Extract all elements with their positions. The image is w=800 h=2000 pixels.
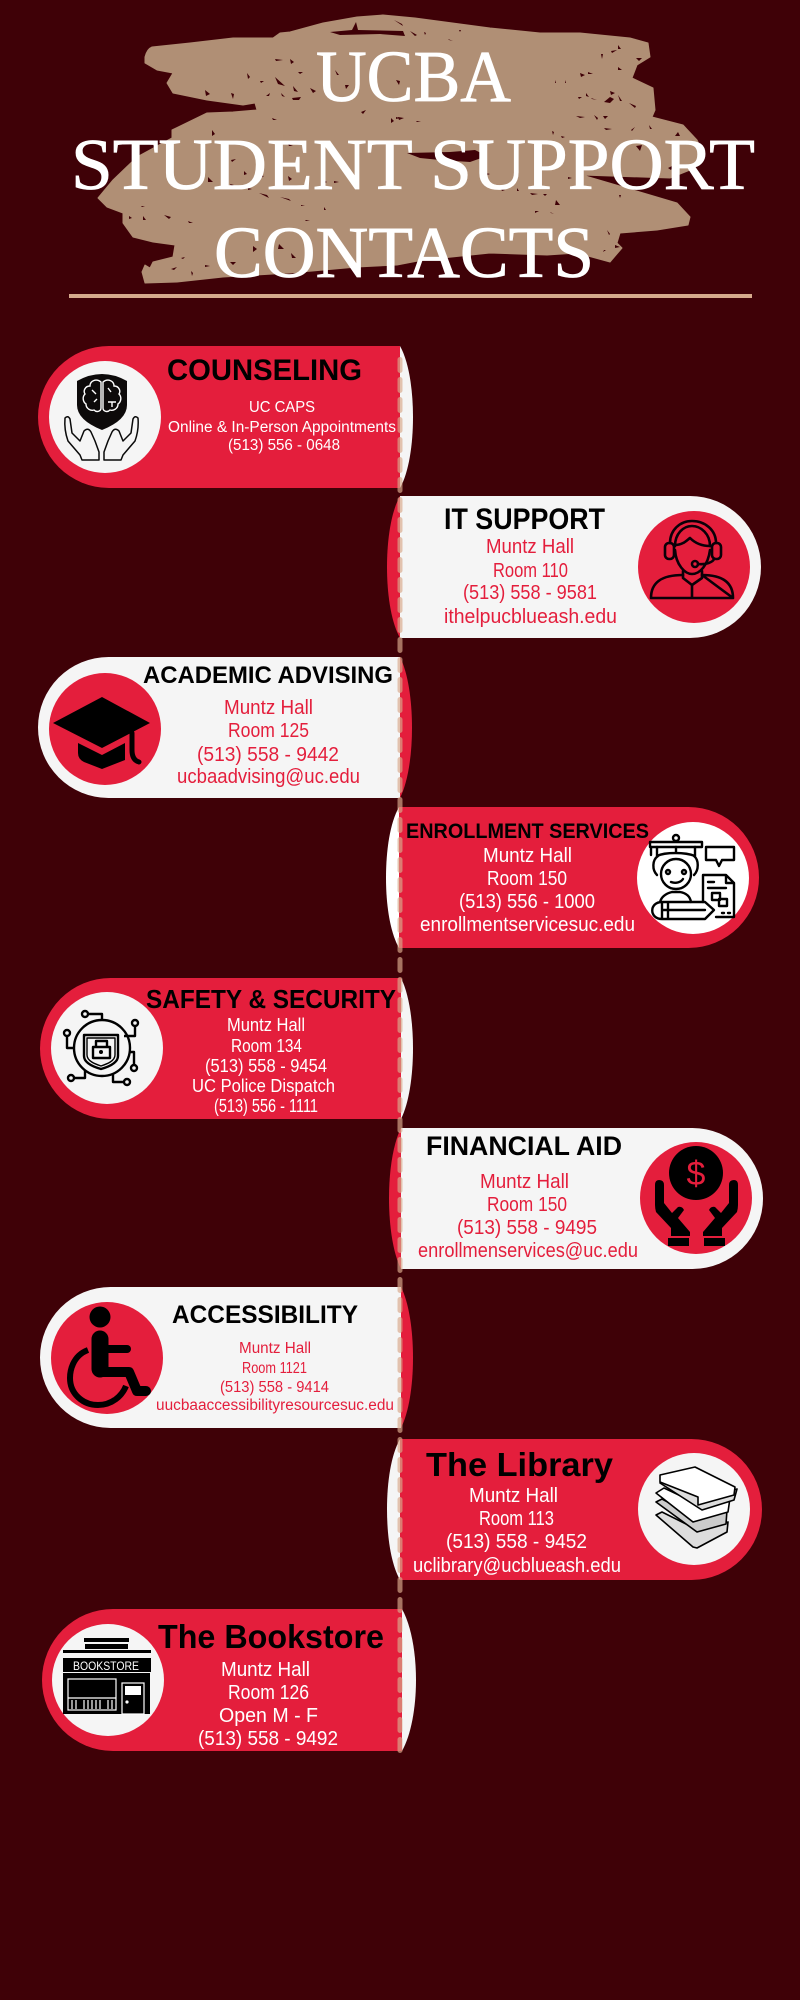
contact details: (513) 556 - 1000	[459, 891, 595, 913]
contact details: UC Police Dispatch	[192, 1076, 335, 1096]
icon: graduation cap	[49, 673, 161, 785]
title text: UCBA	[316, 36, 511, 117]
icon: headset agent	[638, 511, 750, 623]
contact details: (513) 558 - 9495	[457, 1217, 597, 1239]
contact details	[168, 399, 396, 454]
heading: ACADEMIC ADVISING	[143, 662, 393, 689]
contact details: (513) 558 - 9492	[198, 1728, 338, 1750]
icon: bookstore building: BOOKSTORE	[73, 1659, 139, 1673]
panel: IT support	[387, 496, 761, 638]
panel shape	[40, 978, 401, 1119]
contact details: Room 126	[228, 1682, 309, 1704]
panel: accessibility	[40, 1287, 413, 1428]
contact details	[156, 1340, 394, 1414]
icon: stack of books	[638, 1453, 750, 1565]
dashed timeline	[398, 360, 402, 1752]
contact details: Muntz Hall	[221, 1659, 310, 1681]
panel shape	[400, 1439, 762, 1580]
heading: FINANCIAL AID	[426, 1131, 622, 1161]
icon: bookstore building	[52, 1624, 164, 1736]
contact details: Muntz Hall	[239, 1340, 311, 1357]
contact details: (513) 556 - 0648	[228, 437, 340, 454]
contact details: Open M - F	[219, 1705, 318, 1727]
contact details	[444, 536, 617, 628]
contact details: Room 150	[487, 868, 567, 890]
contact details: enrollmenservices@uc.edu	[418, 1240, 638, 1262]
contact details: Room 150	[487, 1194, 567, 1216]
panel: safety and security	[40, 978, 413, 1119]
panel shape	[399, 807, 759, 948]
contact details: Room 113	[479, 1508, 554, 1530]
title text	[71, 36, 755, 293]
contact details	[413, 1485, 621, 1577]
contact details: Muntz Hall	[227, 1015, 305, 1035]
heading: The Library	[426, 1446, 614, 1483]
panel cap	[401, 978, 413, 1119]
panel: financial aid	[389, 1128, 763, 1269]
icon: hands and dollar coin	[640, 1142, 752, 1254]
panel shape	[42, 1609, 402, 1751]
contact details: Muntz Hall	[224, 697, 313, 719]
contact details: ithelpucblueash.edu	[444, 606, 617, 628]
icon: student	[637, 822, 749, 934]
contact details: Room 134	[231, 1036, 302, 1056]
heading: ENROLLMENT SERVICES	[406, 820, 649, 843]
contact details: Muntz Hall	[469, 1485, 558, 1507]
panel: the library	[387, 1439, 762, 1580]
panel: counseling	[38, 346, 413, 488]
title text: STUDENT SUPPORT	[71, 124, 755, 205]
contact details: Muntz Hall	[480, 1171, 569, 1193]
heading: The Bookstore	[158, 1618, 384, 1655]
panel shape	[38, 346, 400, 488]
title text: CONTACTS	[214, 212, 594, 293]
contact details: Room 110	[493, 560, 568, 582]
panel shape	[401, 1128, 763, 1269]
heading: IT SUPPORT	[444, 503, 605, 536]
contact details: (513) 558 - 9442	[197, 744, 339, 766]
contact details: Muntz Hall	[486, 536, 574, 558]
panel: academic advising	[38, 657, 412, 798]
icon: wheelchair	[51, 1302, 163, 1414]
contact details: (513) 558 - 9454	[205, 1056, 327, 1076]
contact details: Muntz Hall	[483, 845, 572, 867]
contact details: uucbaaccessibilityresourcesuc.edu	[156, 1397, 394, 1414]
panel shape	[38, 657, 400, 798]
contact details: (513) 558 - 9452	[446, 1531, 587, 1553]
contact details	[198, 1659, 338, 1750]
contact details	[418, 1171, 638, 1262]
icon: brain and hands	[49, 361, 161, 473]
panel cap	[387, 1439, 400, 1580]
title block	[69, 15, 755, 298]
contact details	[192, 1015, 335, 1116]
panel cap	[389, 1128, 401, 1269]
contact details: enrollmentservicesuc.edu	[420, 914, 635, 936]
panel cap	[386, 807, 399, 948]
contact details: uclibrary@ucblueash.edu	[413, 1555, 621, 1577]
panel cap	[401, 1287, 413, 1428]
contact details	[420, 845, 635, 936]
title underline	[69, 294, 752, 298]
contact details: Room 1121	[242, 1360, 307, 1377]
contact details: Room 125	[228, 720, 309, 742]
contact details: Online & In-Person Appointments	[168, 419, 396, 436]
heading: ACCESSIBILITY	[172, 1301, 358, 1329]
panel cap	[402, 1609, 416, 1751]
panel cap	[400, 657, 412, 798]
panel: the bookstore	[42, 1609, 416, 1751]
heading: SAFETY & SECURITY	[146, 984, 396, 1014]
contact details: (513) 556 - 1111	[214, 1096, 318, 1116]
panel shape	[400, 496, 761, 638]
panel shape	[40, 1287, 401, 1428]
contact details	[177, 697, 360, 788]
icon: circuit shield	[51, 992, 163, 1104]
contact details: UC CAPS	[249, 399, 315, 416]
contact details: ucbaadvising@uc.edu	[177, 766, 360, 788]
panel cap	[400, 346, 413, 488]
heading: COUNSELING	[167, 354, 362, 387]
contact details: (513) 558 - 9581	[463, 582, 597, 604]
panel cap	[387, 496, 400, 638]
panel: enrollment services	[386, 807, 759, 948]
contact details: (513) 558 - 9414	[220, 1379, 329, 1396]
icon: hands and dollar coin: $	[687, 1155, 706, 1193]
brush stroke background	[98, 15, 703, 283]
